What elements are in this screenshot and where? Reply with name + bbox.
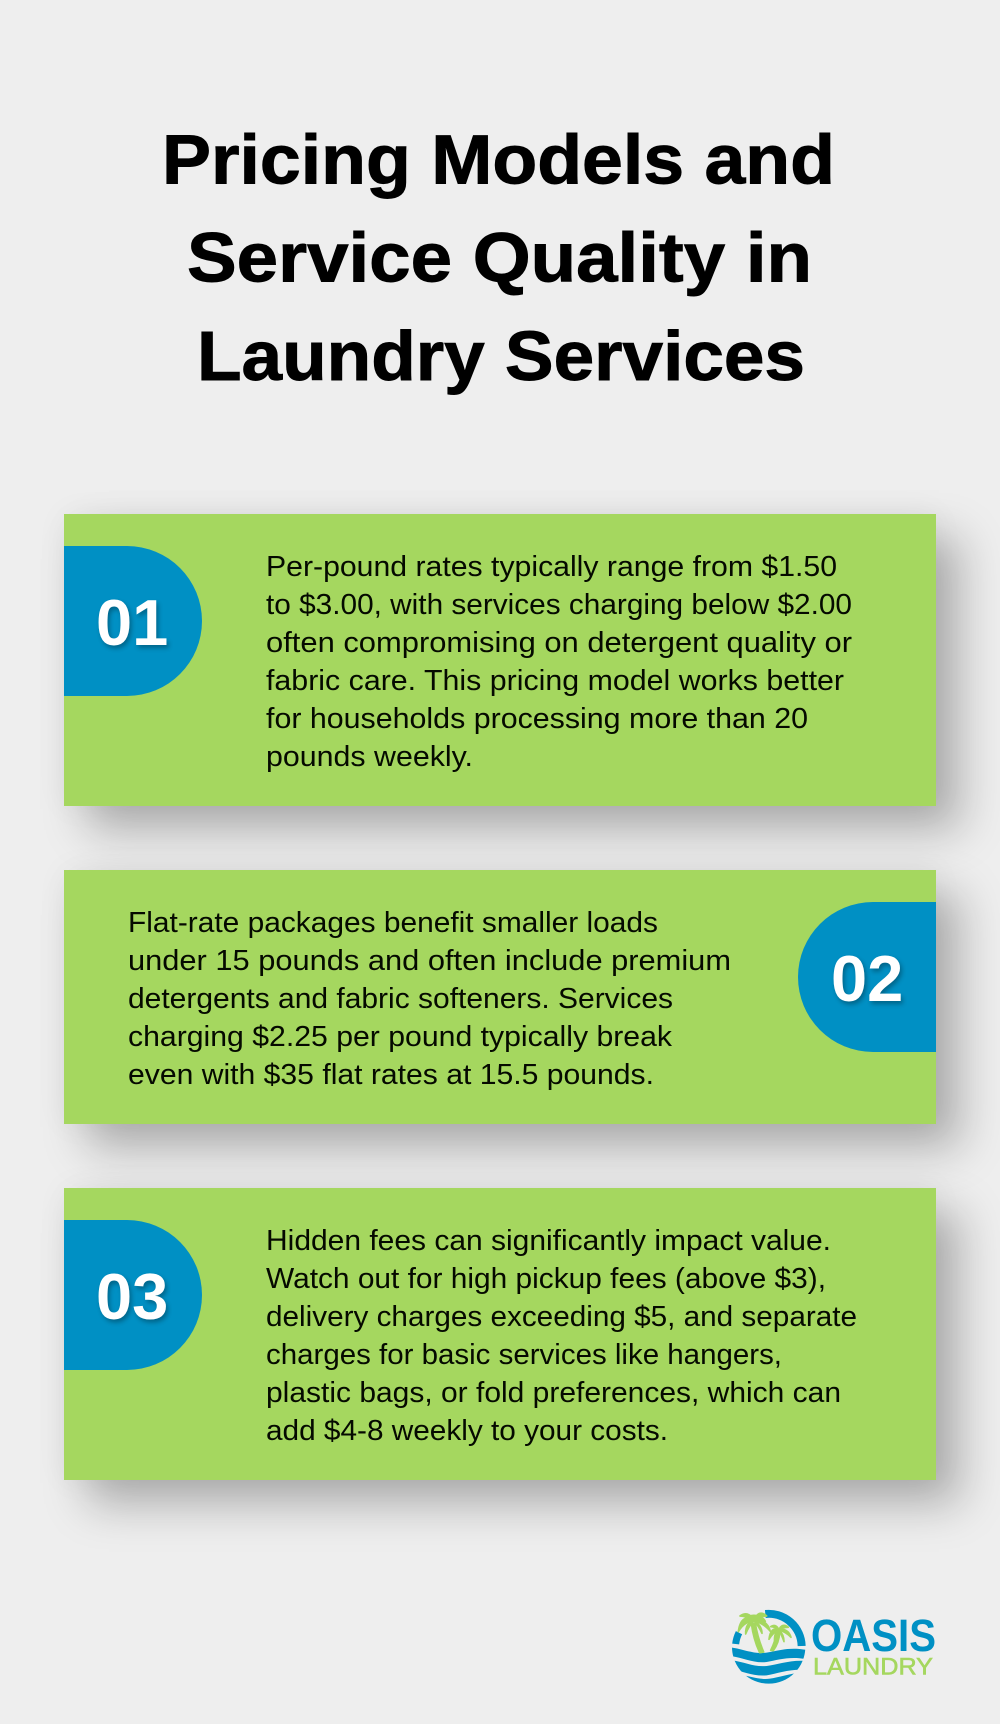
badge: 02: 02 <box>831 942 903 1015</box>
icon: palm trees and waves <box>730 1613 807 1690</box>
text: flat-rate packages: even with $35 flat rates at 15.5 pounds. <box>128 1059 654 1091</box>
text: per-pound rates <box>266 551 853 773</box>
text: per-pound rates: Per-pound rates typically range from $1.50 <box>266 551 837 583</box>
text: hidden fees <box>266 1225 857 1447</box>
logo text: LAUNDRY: LAUNDRY <box>813 1653 933 1680</box>
badge: 01: 01 <box>96 586 168 659</box>
text: hidden fees: plastic bags, or fold preferences, which can <box>266 1377 841 1409</box>
text: flat-rate packages: detergents and fabric softeners. Services <box>128 983 673 1015</box>
text: hidden fees: Watch out for high pickup fees (above $3), <box>266 1263 826 1295</box>
badge: 03: 03 <box>96 1260 168 1333</box>
text: hidden fees: charges for basic services like hangers, <box>266 1339 782 1371</box>
text: per-pound rates: to $3.00, with services charging below $2.00 <box>266 589 852 621</box>
text: hidden fees: add $4-8 weekly to your costs. <box>266 1415 668 1447</box>
logo: Oasis Laundry <box>732 1610 936 1684</box>
text: per-pound rates: for households processing more than 20 <box>266 703 808 735</box>
badge: 03 <box>64 1220 202 1370</box>
panel: flat-rate packages <box>64 870 936 1124</box>
title: Laundry Services <box>197 317 805 395</box>
text: flat-rate packages: Flat-rate packages benefit smaller loads <box>128 907 658 939</box>
text: flat-rate packages: under 15 pounds and often include premium <box>128 945 731 977</box>
text: per-pound rates: fabric care. This pricing model works better <box>266 665 845 697</box>
badge: 01 <box>64 546 202 696</box>
title: Service Quality in <box>187 219 812 297</box>
text: per-pound rates: pounds weekly. <box>266 741 473 773</box>
title: Pricing Models and <box>162 120 835 198</box>
panel: per-pound rates <box>64 514 936 806</box>
text: flat-rate packages: charging $2.25 per pound typically break <box>128 1021 673 1053</box>
text: hidden fees: delivery charges exceeding $5, and separate <box>266 1301 857 1333</box>
badge: 02 <box>798 902 936 1052</box>
panel: hidden fees <box>64 1188 936 1480</box>
text: hidden fees: Hidden fees can significantly impact value. <box>266 1225 831 1257</box>
text: per-pound rates: often compromising on detergent quality or <box>266 627 853 659</box>
text: flat-rate packages <box>128 907 731 1091</box>
title <box>162 120 835 395</box>
logo text: OASIS: OASIS <box>811 1610 936 1661</box>
